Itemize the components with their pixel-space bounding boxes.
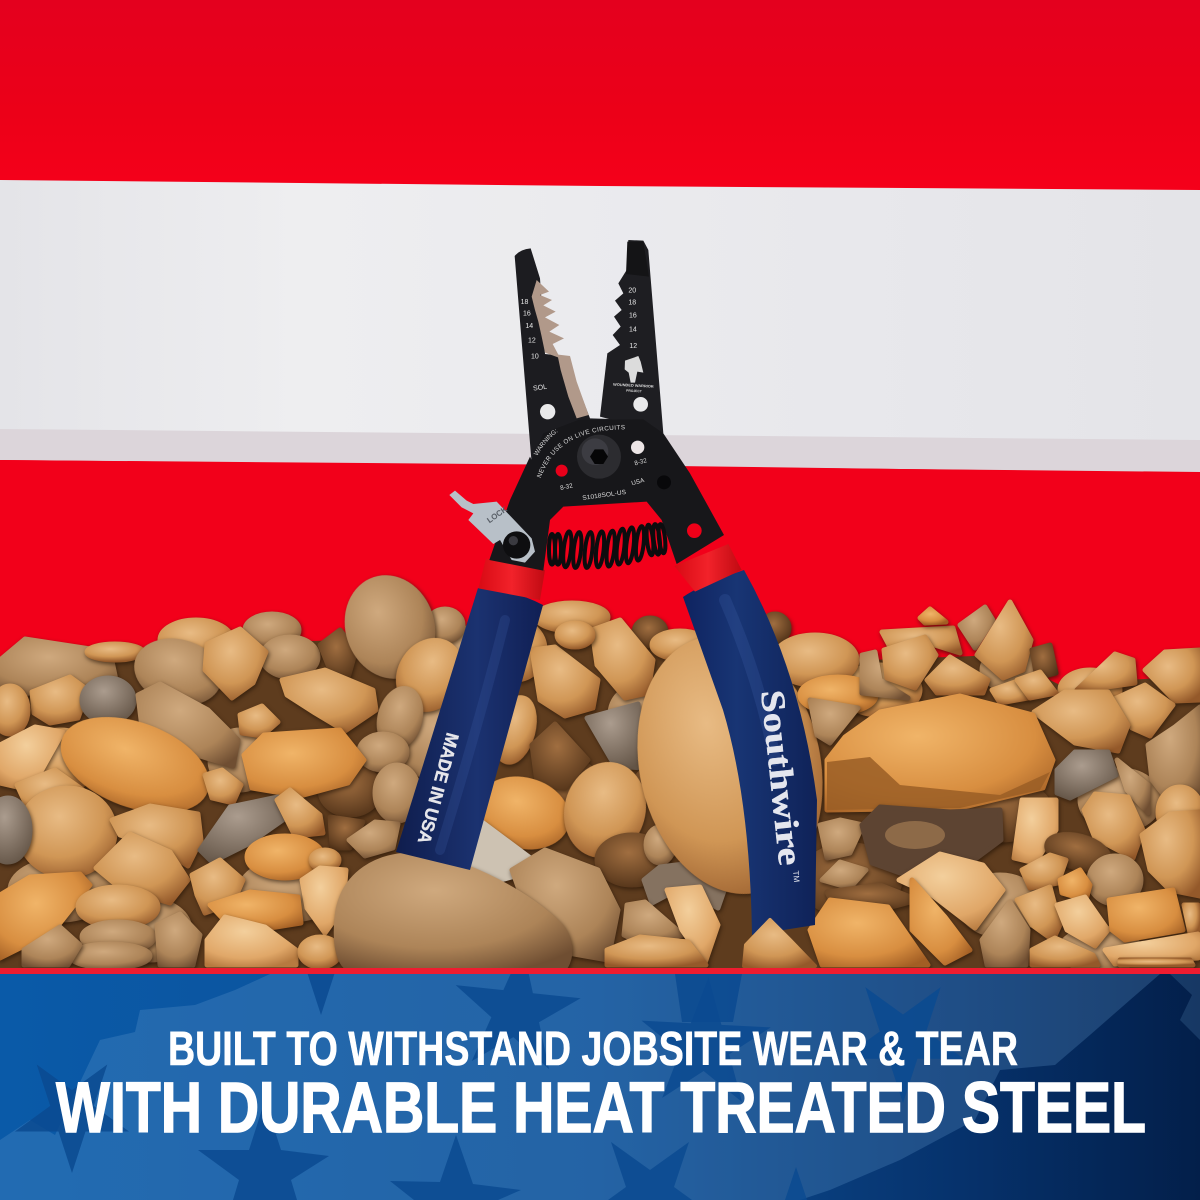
gauge numbers right: 12: [629, 343, 637, 350]
wounded warrior logo: PROJECT: [626, 389, 642, 393]
left handle grip: [396, 588, 543, 870]
gauge numbers left: 10: [531, 353, 539, 360]
wounded warrior logo: [613, 356, 654, 393]
gauge numbers left: [521, 299, 548, 393]
gauge numbers left: 16: [523, 311, 531, 318]
right handle grip: [683, 570, 817, 935]
gauge numbers right: 14: [629, 326, 637, 333]
distressed stars and brush texture: [0, 974, 1200, 1200]
trademark: TM: [791, 870, 801, 883]
red sleeve left: [478, 558, 545, 600]
gauge numbers left: 18: [521, 299, 529, 306]
engraved warning text: S1018SOL-US: [582, 489, 627, 502]
red sleeve right: [674, 544, 742, 592]
gauge numbers right: [628, 287, 637, 350]
gauge numbers right: 18: [628, 299, 636, 306]
text: MADE IN USA: MADE IN USA: [414, 731, 463, 846]
gauge numbers left: 12: [528, 337, 536, 344]
engraved warning text: NEVER USE ON LIVE CIRCUITS: [536, 424, 625, 478]
banner background: [0, 974, 1200, 1200]
banner: [0, 968, 1200, 1200]
lock tab: LOCK: [485, 504, 509, 525]
flag background: [0, 0, 1200, 700]
pivot body: [489, 419, 724, 571]
engraved warning text: [534, 424, 648, 502]
gauge numbers right: 16: [629, 312, 637, 319]
engraved warning text: WARNING:: [534, 429, 558, 455]
left jaw: [515, 248, 643, 483]
wounded warrior logo: WOUNDED WARRIOR: [613, 383, 654, 389]
engraved warning text: 8-32: [560, 482, 574, 492]
left jaw silver cutting edge: [532, 280, 589, 418]
gauge numbers right: 20: [628, 287, 636, 294]
lock tab: [449, 491, 535, 563]
red rule: [0, 968, 1200, 974]
engraved warning text: 8-32: [634, 457, 648, 467]
gauge numbers left: 14: [525, 323, 533, 330]
right jaw: [600, 240, 663, 433]
pivot screw: [577, 435, 621, 479]
rock pile: [0, 566, 1200, 972]
jaw holes: [540, 397, 702, 538]
gauge numbers left: SOL: [533, 384, 548, 393]
engraved warning text: USA: [631, 477, 646, 487]
text: Southwire: Southwire: [753, 688, 808, 867]
rock in front of the right handle: [744, 920, 815, 966]
spring: [549, 524, 667, 568]
wire stripper head: [449, 240, 742, 600]
